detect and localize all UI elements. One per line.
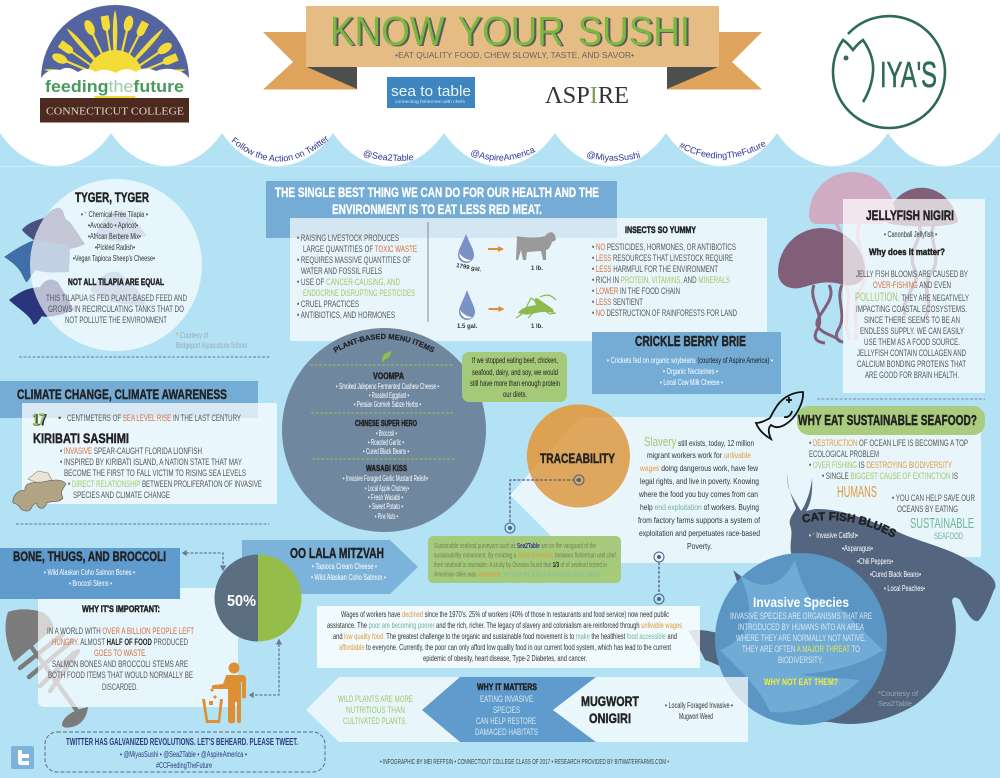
icon: catfish bbox=[688, 473, 996, 724]
callout: Sea2Table traceability: sustainability movement. By creating a direct connection between fisherman and chef, bbox=[434, 550, 617, 560]
description: INTRODUCED BY HUMANS INTO AN AREA bbox=[738, 622, 864, 633]
icon: fish outline bbox=[756, 392, 803, 439]
handle: @MiyasSushi bbox=[587, 151, 640, 162]
courtesy note: Sea2Table: *Courtesy of bbox=[878, 691, 918, 698]
menu list: • Wild Alaskan Coho Salmon Bones • bbox=[44, 568, 135, 577]
description: GROWS IN RECIRCULATING TANKS THAT DO bbox=[48, 304, 184, 315]
description: BOTH FOOD ITEMS THAT WOULD NORMALLY BE bbox=[48, 670, 193, 681]
description: slavery: Poverty. bbox=[687, 541, 712, 551]
courtesy note bbox=[176, 331, 247, 350]
menu: Wasabi Kiss: • Pine Nuts • bbox=[375, 512, 398, 521]
footer credit: • INFOGRAPHIC BY MEI REFFSIN • CONNECTICUT COLLEGE CLASS OF 2017 • RESEARCH PROVIDED BY BITWATERFARMS.COM • bbox=[380, 757, 669, 766]
heading bbox=[275, 184, 599, 217]
bullets: • INSPIRED BY KIRIBATI ISLAND, A NATION STATE THAT MAY bbox=[60, 457, 242, 468]
callout: Sea2Table traceability: American cities was mislabeled. You have the right to know what you're eating. bbox=[434, 570, 600, 578]
icon: fish school bbox=[4, 208, 146, 325]
logo: Sea to Table: sea to table bbox=[391, 83, 471, 100]
panel: Crickle Berry Brie bbox=[592, 332, 781, 394]
heading: THE SINGLE BEST THING WE CAN DO FOR OUR HEALTH AND THE bbox=[275, 184, 599, 200]
callout: protein: our diets. bbox=[503, 389, 527, 399]
description: INVASIVE SPECIES ARE ORGANISMS THAT ARE bbox=[730, 611, 872, 622]
twitter handles on scallops bbox=[232, 136, 766, 162]
insect bullets bbox=[592, 242, 737, 319]
menu list: •Asparagus• bbox=[842, 544, 873, 553]
description: HUNGRY. ALMOST HALF OF FOOD PRODUCED bbox=[52, 637, 188, 648]
icon: water drop, cricket bbox=[457, 290, 556, 330]
handle: @AspireAmerica bbox=[471, 148, 536, 162]
description: slavery: Slavery still exists, today, 12 million bbox=[644, 434, 754, 449]
title banner bbox=[263, 6, 762, 90]
menu: Voompa: • Persian Gormeh Sabze Herbs • bbox=[354, 400, 421, 409]
heading: PLANT-BASED MENU ITEMS bbox=[333, 334, 434, 353]
description bbox=[46, 293, 187, 326]
bullets bbox=[809, 438, 975, 541]
menu list: • Locally Foraged Invasive • bbox=[665, 701, 733, 710]
courtesy note: Bridgeport Aquaculture School bbox=[176, 341, 247, 350]
description: CAN HELP RESTORE bbox=[476, 716, 536, 727]
heading: ENVIRONMENT IS TO EAT LESS RED MEAT. bbox=[332, 201, 542, 217]
bullets bbox=[60, 446, 262, 501]
menu list: • Wild Alaskan Coho Salmon • bbox=[311, 573, 386, 582]
callout text: WHY NOT EAT THEM? bbox=[764, 677, 838, 688]
description bbox=[47, 626, 194, 693]
menu: Chinese Super Hero: • Roasted Garlic • bbox=[368, 438, 404, 447]
description: SPECIES bbox=[493, 705, 520, 716]
heading: ONIGIRI bbox=[589, 710, 631, 726]
menu list: • Tapioca Cream Cheese • bbox=[312, 562, 377, 571]
menu: Wasabi Kiss: • Sweet Potato • bbox=[369, 502, 403, 511]
panel: wages: and low quality food. The greatest challenge to the organic and sustainable food movement is to make the healthiest food accessible and bbox=[333, 631, 677, 641]
menu: Wasabi Kiss: • Fresh Wasabi • bbox=[368, 493, 403, 502]
menu: Voompa bbox=[336, 371, 439, 409]
menu list bbox=[809, 531, 925, 593]
icon: lionfish bbox=[13, 471, 66, 511]
description: BIODIVERSITY. bbox=[778, 655, 823, 666]
panel: wages bbox=[317, 606, 700, 668]
menu list: • Local Peaches• bbox=[884, 584, 925, 593]
menu list: •African Berbere Mix• bbox=[88, 232, 141, 241]
description: slavery: where the food you buy comes from can bbox=[638, 489, 758, 499]
heading: CRICKLE BERRY BRIE bbox=[635, 333, 746, 350]
panel: Oo Lala Mitzvah bbox=[242, 540, 418, 594]
menu list: Mugwort Weed bbox=[679, 712, 713, 721]
panel: Why eat sustainable seafood bbox=[787, 406, 985, 557]
menu list: • Crickets fed on organic soybeans (courtesy of Aspire America) • bbox=[607, 356, 773, 365]
handle: @Sea2Table bbox=[364, 150, 414, 161]
icon: jellyfish bbox=[778, 172, 958, 343]
livestock bullets bbox=[297, 233, 417, 321]
heading: WHY IT MATTERS bbox=[477, 682, 537, 692]
livestock bullets: LARGE QUANTITIES OF TOXIC WASTE bbox=[303, 244, 417, 255]
menu: Chinese Super Hero bbox=[355, 418, 417, 456]
bullets: ECOLOGICAL PROBLEM bbox=[809, 449, 879, 460]
insect bullets: • LESS HARMFUL FOR THE ENVIRONMENT bbox=[592, 264, 718, 275]
panel: wages: assistance. The poor are becoming poorer and the rich, richer. The legacy of slavery and colonialism are reinforced through unlivable wages bbox=[327, 620, 682, 630]
description: WHERE THEY ARE NORMALLY NOT NATIVE. bbox=[736, 633, 866, 644]
menu: Wasabi Kiss: • Invasive Foraged Garlic Mustard Relish• bbox=[343, 474, 428, 483]
panel: eat less red meat bbox=[266, 181, 767, 341]
callout: protein: If we stopped eating beef, chicken, bbox=[472, 355, 558, 365]
bullets: SEAFOOD bbox=[934, 531, 963, 541]
insect bullets: • LOWER IN THE FOOD CHAIN bbox=[592, 286, 680, 297]
description: NOT POLLUTE THE ENVIRONMENT bbox=[65, 315, 167, 326]
handle: #CCFeedingTheFuture bbox=[679, 142, 766, 160]
logo: Aspire: ΛSPIRE bbox=[545, 83, 629, 109]
logo: Miya's bbox=[833, 16, 945, 128]
menu list bbox=[665, 701, 733, 721]
insects heading: INSECTS SO YUMMY bbox=[625, 225, 696, 236]
panel: wild plants arrow bbox=[306, 677, 475, 742]
description: THEY ARE OFTEN A MAJOR THREAT TO bbox=[742, 644, 860, 655]
insect bullets: • LESS RESOURCES THAT LIVESTOCK REQUIRE bbox=[592, 253, 733, 264]
livestock bullets: • RAISING LIVESTOCK PRODUCES bbox=[297, 233, 399, 244]
panel: wages: epidemic of obesity, heart disease, Type-2 Diabetes, and cancer. bbox=[423, 653, 587, 663]
statistic: • bbox=[58, 413, 61, 424]
menu list: •Vegan Tapioca Sheep's Cheese• bbox=[73, 254, 155, 263]
panel: wild plants arrow: WILD PLANTS ARE MORE bbox=[338, 694, 413, 705]
livestock bullets: • REQUIRES MASSIVE QUANTITIES OF bbox=[297, 255, 411, 266]
icon: water drop, cricket: 1 lb. bbox=[531, 324, 543, 330]
description: slavery bbox=[638, 434, 761, 551]
description: slavery: exploitation and perpetuates race-based bbox=[639, 528, 760, 538]
menu list bbox=[607, 356, 773, 387]
menu: Voompa: VOOMPA bbox=[373, 371, 404, 382]
heading: TYGER, TYGER bbox=[75, 189, 149, 205]
chart: 50% pie bbox=[214, 554, 302, 642]
arrow: slavery connector bbox=[654, 552, 664, 604]
bullets: • INVASIVE SPEAR-CAUGHT FLORIDA LIONFISH bbox=[60, 446, 202, 457]
logo: Feeding the Future bbox=[40, 5, 190, 122]
description: slavery: help end exploitation of workers. Buying bbox=[640, 502, 759, 512]
heading: CAT FISH BLUES bbox=[802, 512, 896, 538]
livestock bullets: • CRUEL PRACTICES bbox=[297, 299, 359, 310]
bullets: • OVER FISHING IS DESTROYING BIODIVERSITY bbox=[809, 460, 952, 471]
bullets: • SINGLE BIGGEST CAUSE OF EXTINCTION IS bbox=[822, 471, 958, 482]
panel: wild plants arrow: NUTRITIOUS THAN bbox=[346, 705, 405, 716]
menu list: •Pickled Radish• bbox=[95, 243, 135, 252]
icon: water drop, cow: 1 lb. bbox=[531, 266, 543, 272]
logo: Sea to Table: connecting fishermen with chefs bbox=[395, 99, 466, 104]
menu: Chinese Super Hero: • Broccoli • bbox=[376, 429, 397, 438]
statistic: CENTIMETERS OF SEA LEVEL RISE IN THE LAST CENTURY bbox=[67, 413, 241, 424]
heading: BONE, THUGS, AND BROCCOLI bbox=[13, 548, 166, 564]
menu list bbox=[44, 568, 135, 588]
handle: Follow the Action on Twitter bbox=[232, 136, 328, 162]
bullets: • DIRECT RELATIONSHIP BETWEEN PROLIFERATION OF INVASIVE bbox=[68, 479, 262, 490]
college name: CONNECTICUT COLLEGE bbox=[46, 106, 184, 118]
description bbox=[855, 269, 969, 381]
bullets: BECOME THE FIRST TO FALL VICTIM TO RISING SEA LEVELS bbox=[64, 468, 246, 479]
description: IN A WORLD WITH OVER A BILLION PEOPLE LEFT bbox=[47, 626, 194, 637]
menu: Chinese Super Hero: CHINESE SUPER HERO bbox=[355, 418, 417, 428]
description: EATING INVASIVE bbox=[480, 694, 533, 705]
description: DISCARDED. bbox=[102, 682, 138, 693]
panel: plant-based menu circle bbox=[282, 328, 486, 532]
panel: wild plants arrow: CULTIVATED PLANTS. bbox=[343, 716, 407, 727]
panel: Tyger Tyger bbox=[4, 179, 247, 351]
courtesy note: * Courtesy of bbox=[176, 331, 209, 340]
heading: JELLYFISH NIGIRI bbox=[866, 207, 954, 223]
statistic: 17 bbox=[33, 410, 47, 430]
subheading: NOT ALL TILAPIA ARE EQUAL bbox=[68, 277, 164, 288]
menu list: •Avocado • Apricot• bbox=[88, 221, 138, 230]
heading: OO LALA MITZVAH bbox=[290, 545, 384, 562]
menu list: •Cured Black Beans• bbox=[870, 570, 921, 579]
menu list: • * Invasive Catfish• bbox=[809, 531, 858, 540]
heading: Invasive Species bbox=[753, 594, 849, 610]
bullets: OCEANS BY EATING bbox=[897, 504, 958, 515]
description: GOES TO WASTE. bbox=[94, 648, 147, 659]
callout: protein bbox=[462, 352, 567, 402]
subtitle: •EAT QUALITY FOOD, CHEW SLOWLY, TASTE, AND SAVOR• bbox=[395, 50, 634, 60]
callout: Sea2Table traceability bbox=[428, 536, 621, 583]
description: slavery: legal rights, and live in poverty. Knowing bbox=[640, 476, 759, 486]
heading: KIRIBATI SASHIMI bbox=[33, 430, 129, 446]
description: slavery: from factory farms supports a system of bbox=[638, 515, 761, 525]
description: slavery: migrant workers work for unlivable bbox=[647, 450, 751, 460]
panel: Bone, Thugs, and Broccoli bbox=[0, 548, 238, 728]
insect bullets: • RICH IN PROTEIN, VITAMINS, AND MINERALS bbox=[592, 275, 730, 286]
insect bullets: • LESS SENTIENT bbox=[592, 297, 643, 308]
icon: twitter bbox=[11, 746, 34, 769]
menu list: • * Chemical-Free Tilapia • bbox=[81, 210, 148, 219]
bullets: HUMANS bbox=[837, 484, 877, 501]
icon: leaf bbox=[382, 351, 391, 363]
livestock bullets: • ANTIBIOTICS, AND HORMONES bbox=[297, 310, 395, 321]
handles bbox=[120, 750, 247, 770]
subheading: Why does it matter? bbox=[869, 247, 945, 257]
description: THIS TILAPUA IS FED PLANT-BASED FEED AND bbox=[46, 293, 187, 304]
panel: wages: Wages of workers have declined since the 1970's. 25% of workers (40% of those in restaurants and food service) now need public bbox=[341, 609, 670, 619]
callout: protein: seafood, dairy, and soy, we would bbox=[472, 367, 558, 377]
description: DAMAGED HABITATS bbox=[475, 727, 538, 738]
logo: Miya's: IYA'S bbox=[880, 54, 937, 95]
menu list: • Broccoli Stems • bbox=[69, 579, 112, 588]
description: SALMON BONES AND BROCCOLI STEMS ARE bbox=[52, 659, 188, 670]
panel: Cat Fish Blues text bbox=[802, 512, 925, 593]
menu list: • Organic Nectarines • bbox=[663, 367, 718, 376]
courtesy note: Sea2Table: Sea2Table bbox=[878, 701, 912, 708]
title: KNOW YOUR SUSHI bbox=[330, 8, 690, 54]
menu: Voompa: • Roasted Eggplant • bbox=[369, 391, 409, 400]
icon: water drop, cow: 1799 gal. bbox=[456, 263, 482, 273]
livestock bullets: WATER AND FOSSIL FUELS bbox=[301, 266, 382, 277]
menu list bbox=[73, 210, 155, 263]
icon: water drop, cow bbox=[456, 232, 556, 273]
handles: #CCFeedingTheFuture bbox=[156, 761, 212, 770]
heading: TWITTER HAS GALVANIZED REVOLUTIONS. LET'S BEHEARD. PLEASE TWEET. bbox=[66, 737, 298, 748]
menu list bbox=[311, 562, 386, 582]
statistic: 17 bbox=[32, 410, 45, 429]
title banner: KNOW YOUR SUSHI bbox=[332, 9, 692, 55]
panel: traceability and slavery bbox=[510, 404, 787, 563]
description bbox=[475, 694, 538, 738]
subheading: WHY IT'S IMPORTANT: bbox=[82, 604, 160, 615]
bullets: SPECIES AND CLIMATE CHANGE bbox=[73, 490, 170, 501]
livestock bullets: • USE OF CANCER-CAUSING, AND bbox=[297, 277, 400, 288]
icon: person at trash can bbox=[202, 662, 246, 723]
menu: Wasabi Kiss: • Local Apple Chutney• bbox=[365, 484, 409, 493]
menu: Chinese Super Hero: • Cured Black Beans • bbox=[363, 447, 409, 456]
handles: • @MiyasSushi • @Sea2Table • @AspireAmerica • bbox=[120, 750, 247, 759]
description bbox=[730, 611, 872, 666]
panel: why it matters arrow bbox=[422, 677, 596, 742]
description: slavery: wages doing dangerous work, have few bbox=[639, 463, 759, 473]
logo: Sea to Table bbox=[387, 77, 475, 108]
callout: Sea2Table traceability: their seafood is traceable. A study by Oceana found that 1/3 of of seafood tested in bbox=[434, 560, 607, 569]
arrow: person to pie bbox=[250, 640, 281, 697]
panel: Jellyfish Nigiri bbox=[778, 172, 985, 393]
icon: fish bones bbox=[6, 609, 88, 728]
arrow: bone panel to pie bbox=[183, 551, 225, 570]
menu: Voompa: • Smoked Jalepeno Fermented Cashew Cheese • bbox=[336, 382, 439, 391]
heading: TRACEABILITY bbox=[540, 450, 615, 466]
courtesy note: Sea2Table bbox=[878, 691, 918, 708]
icon: water drop, cricket: 1.5 gal. bbox=[457, 324, 478, 330]
statistic bbox=[32, 410, 241, 430]
panel: wages: affordable to everyone. Currently, the poor can only afford low quality food in our current food system, which has lead to the current bbox=[339, 642, 671, 652]
insect bullets: • NO PESTICIDES, HORMONES, OR ANTIBIOTICS bbox=[592, 242, 736, 253]
heading bbox=[581, 693, 639, 726]
callout: Sea2Table traceability: Sustainable seafood purveyors such as Sea2Table are on the vanguard of the bbox=[434, 541, 596, 550]
menu: Wasabi Kiss bbox=[343, 463, 428, 521]
panel: Invasive Species circle bbox=[715, 553, 887, 725]
menu: Wasabi Kiss: WASABI KISS bbox=[366, 463, 407, 473]
panel: Mugwort Onigiri bbox=[553, 677, 748, 742]
callout: protein: still have more than enough protein bbox=[470, 378, 560, 388]
heading: MUGWORT bbox=[581, 693, 639, 709]
logo wordmark: feedingthefuture bbox=[45, 77, 184, 96]
menu list: • Local Cow Milk Cheese • bbox=[660, 378, 723, 387]
panel: twitter call to action bbox=[45, 732, 325, 772]
menu item: • Canonball Jellyfish • bbox=[884, 230, 937, 239]
insect bullets: • NO DESTRUCTION OF RAINFORESTS FOR LAND bbox=[592, 308, 737, 319]
livestock bullets: ENDOCRINE DISRUPTING PESTICIDES bbox=[303, 288, 415, 299]
arrow: traceability connector bbox=[505, 475, 584, 533]
panel: Climate change bbox=[0, 381, 277, 511]
chart: 50% pie: 50% bbox=[227, 593, 256, 610]
description: OVER-FISHING AND EVEN bbox=[873, 280, 951, 291]
menu list: •Chili Peppers• bbox=[857, 557, 893, 566]
heading: CLIMATE CHANGE, CLIMATE AWARENESS bbox=[17, 386, 227, 402]
